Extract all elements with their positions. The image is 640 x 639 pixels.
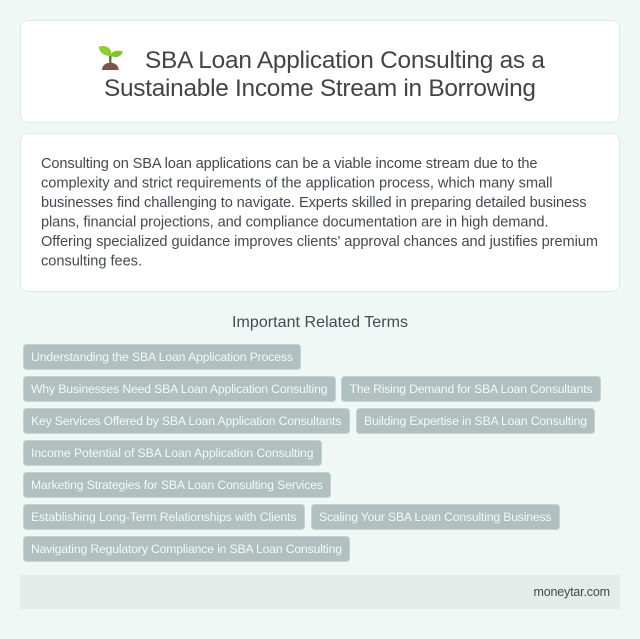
chip: building expertise [356, 408, 594, 434]
chip: rising demand: The Rising Demand for SBA Loan Consultants [350, 382, 592, 396]
chip: regulatory compliance [24, 536, 350, 562]
text block: summary: plans, financial projections, and compliance documentation are in high demand. [41, 214, 548, 230]
title: Sustainable Income Stream in Borrowing [104, 75, 536, 102]
chip: rising demand [342, 376, 600, 402]
chip: regulatory compliance: Navigating Regulatory Compliance in SBA Loan Consulting [31, 542, 342, 556]
text block: summary [41, 156, 598, 270]
text block: summary: Consulting on SBA loan applications can be a viable income stream due to the [41, 156, 538, 172]
icon: seedling [99, 46, 123, 70]
chip: understanding the process [24, 344, 300, 370]
text block: summary: businesses find challenging to navigate. Experts skilled in preparing detailed business [41, 195, 586, 211]
panel: related term chips [24, 344, 600, 562]
chip: marketing strategies: Marketing Strategies for SBA Loan Consulting Services [31, 478, 323, 492]
chip: marketing strategies [24, 472, 330, 498]
chip: income potential [24, 440, 322, 466]
chip: building expertise: Building Expertise in SBA Loan Consulting [364, 414, 587, 428]
chip: income potential: Income Potential of SBA Loan Application Consulting [31, 446, 314, 460]
heading: important related terms: Important Related Terms [232, 314, 408, 331]
chip: long-term relationships: Establishing Long-Term Relationships with Clients [31, 510, 296, 524]
panel: title card [20, 20, 620, 122]
title: SBA Loan Application Consulting as a [145, 47, 545, 74]
panel: summary card [20, 134, 620, 292]
chip: why businesses need consulting [24, 376, 336, 402]
footer source text: moneytar.com [534, 585, 610, 599]
chip: scaling: Scaling Your SBA Loan Consulting Business [319, 510, 552, 524]
chip: key services: Key Services Offered by SBA Loan Application Consultants [31, 414, 342, 428]
chip: key services [24, 408, 350, 434]
chip: why businesses need consulting: Why Businesses Need SBA Loan Application Consulting [31, 382, 328, 396]
chip: understanding the process: Understanding the SBA Loan Application Process [31, 350, 293, 364]
chip: scaling [312, 504, 560, 530]
chip: long-term relationships [24, 504, 304, 530]
text block: summary: complexity and strict requirements of the application process, which many small [41, 176, 552, 192]
title [104, 47, 545, 102]
text block: summary: consulting fees. [41, 254, 142, 270]
text block: summary: Offering specialized guidance improves clients' approval chances and justifies premium [41, 234, 598, 250]
footer [20, 575, 620, 609]
